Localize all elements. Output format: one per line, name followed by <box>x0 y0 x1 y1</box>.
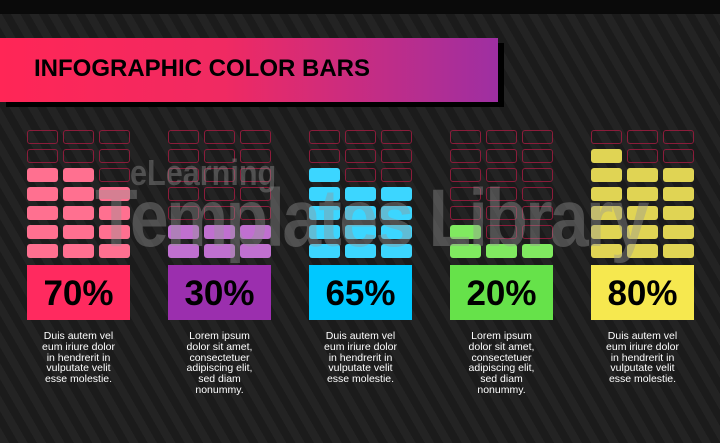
panel: 20% green: Lorem ipsum <box>471 330 532 342</box>
panel: 80% yellow <box>591 130 694 385</box>
panel: 70% pink: in hendrerit in <box>47 352 110 364</box>
panel: 20% green: 20% <box>466 274 537 313</box>
panel: 80% yellow: 80% <box>607 274 678 313</box>
panel: 80% yellow: vulputate velit <box>610 362 675 374</box>
panel: 20% green: adipiscing elit, <box>469 362 534 374</box>
text: nonummy. <box>195 384 244 396</box>
panel: 70% pink: vulputate velit <box>46 362 111 374</box>
panel: 65% cyan: eum iriure dolor <box>324 341 397 353</box>
panel: 30% purple <box>168 130 271 396</box>
panel: 20% green: dolor sit amet, <box>469 341 534 353</box>
panel: 70% pink <box>27 130 130 385</box>
title: INFOGRAPHIC COLOR BARS <box>34 55 370 82</box>
panel: 65% cyan <box>309 130 412 385</box>
watermark: Templates Library <box>95 173 647 264</box>
panel: 65% cyan: in hendrerit in <box>329 352 392 364</box>
panel: 80% yellow: Duis autem vel <box>608 330 677 342</box>
panel: 65% cyan: Duis autem vel <box>326 330 395 342</box>
panel: 30% purple: 30% <box>184 274 255 313</box>
panel: 70% pink: Duis autem vel <box>44 330 113 342</box>
panel: 30% purple: consectetuer <box>189 352 250 364</box>
panel: 20% green <box>450 130 553 396</box>
panel: 65% cyan: 65% <box>325 274 396 313</box>
panel: 80% yellow: eum iriure dolor <box>606 341 679 353</box>
panel: 70% pink: eum iriure dolor <box>42 341 115 353</box>
panel: 20% green: sed diam <box>480 373 523 385</box>
title banner <box>0 38 504 107</box>
panel: 30% purple: Lorem ipsum <box>189 330 250 342</box>
panel: 30% purple: dolor sit amet, <box>187 341 252 353</box>
panel: 80% yellow: esse molestie. <box>609 373 676 385</box>
panel: 20% green: consectetuer <box>471 352 532 364</box>
panel: 80% yellow: in hendrerit in <box>611 352 674 364</box>
panel: 65% cyan: vulputate velit <box>328 362 393 374</box>
panel: 30% purple: adipiscing elit, <box>187 362 252 374</box>
panel: 30% purple: sed diam <box>198 373 241 385</box>
watermark: eLearning <box>130 152 276 193</box>
panel: 65% cyan: esse molestie. <box>327 373 394 385</box>
text: nonummy. <box>477 384 526 396</box>
panel: 70% pink: 70% <box>43 274 114 313</box>
panel: 70% pink: esse molestie. <box>45 373 112 385</box>
